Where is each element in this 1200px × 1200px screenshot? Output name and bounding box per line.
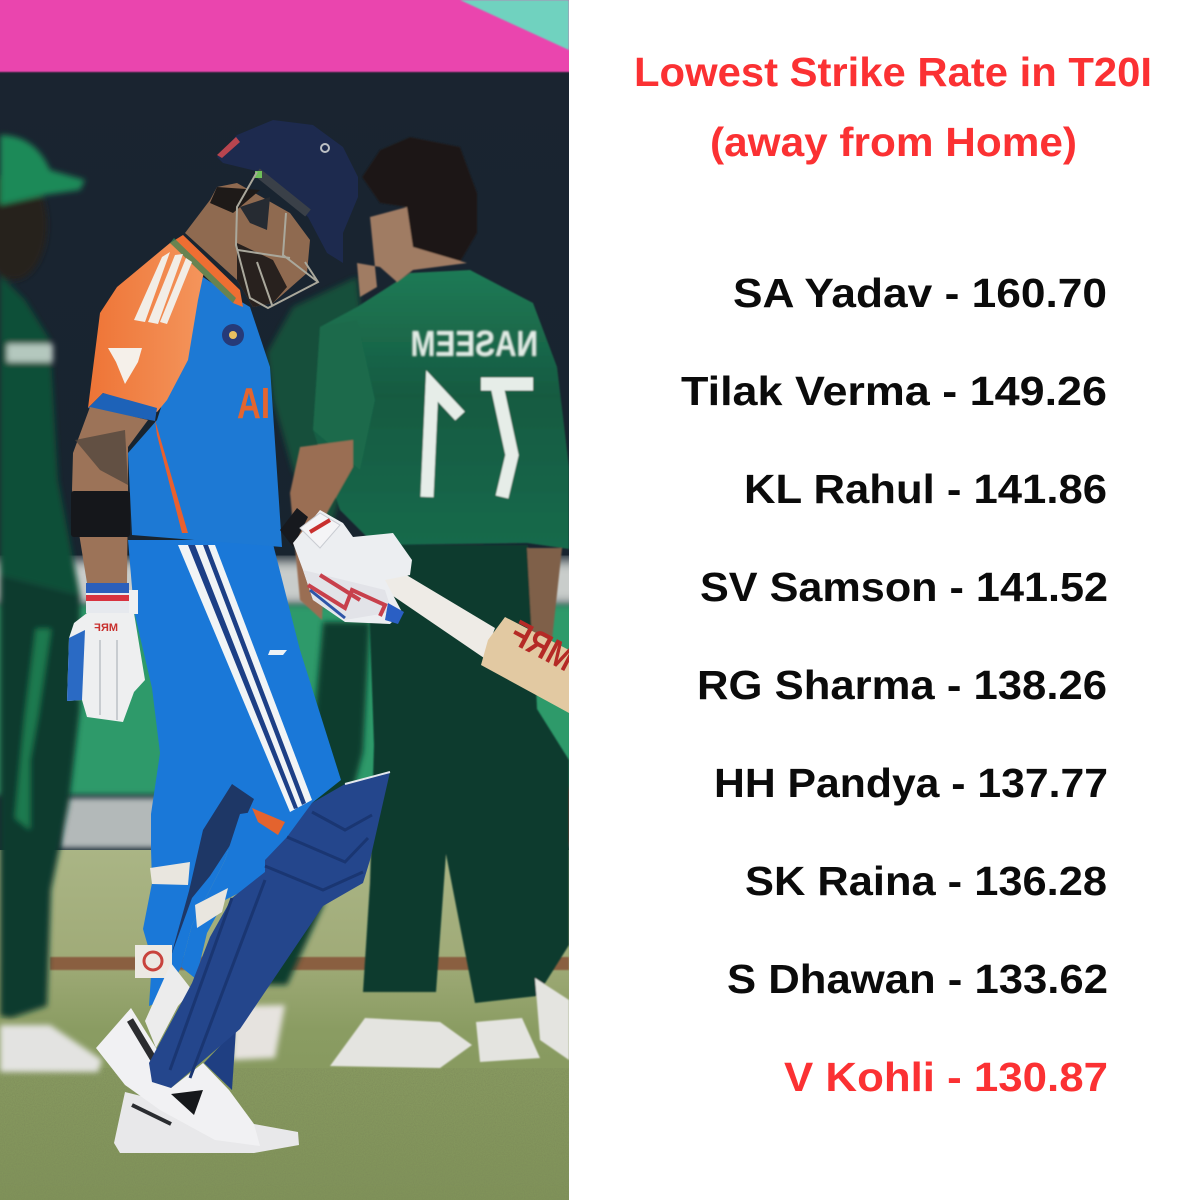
main bowler body [290,137,569,1068]
row: V Kohli highlighted: V Kohli - 130.87 [784,1054,1108,1100]
panel: white background for stats [569,0,1200,1200]
batter: right arm, gloves and bat: MRF [504,612,581,679]
batter: right arm, gloves and bat [280,508,581,713]
title: (away from Home) [710,119,1077,165]
row: Tilak Verma: Tilak Verma - 149.26 [681,368,1107,414]
bowler in green with number on back [232,137,569,1068]
photo: batter walking off with bowlers behind [0,0,590,1200]
ranking list: players and strike rates [681,270,1108,1100]
row: KL Rahul: KL Rahul - 141.86 [744,466,1107,512]
batter: pads and shoes [96,772,390,1153]
title: Lowest Strike Rate in T20I [634,49,1152,95]
main bowler body: NASEEM [411,324,538,364]
title [634,49,1152,165]
second player behind [232,277,370,1060]
batter: jersey [88,235,282,547]
row: SV Samson: SV Samson - 141.52 [700,564,1108,610]
batter: helmet and face [185,120,358,308]
row: SK Raina: SK Raina - 136.28 [745,858,1107,904]
batter: trousers [128,540,341,1006]
row: RG Sharma: RG Sharma - 138.26 [697,662,1107,708]
stadium background [0,0,590,1200]
row: SA Yadav: SA Yadav - 160.70 [733,270,1107,316]
row: HH Pandya: HH Pandya - 137.77 [714,760,1108,806]
row: S Dhawan: S Dhawan - 133.62 [727,956,1108,1002]
batter: left arm and glove [67,407,148,722]
batter: jersey: AI [237,379,270,428]
left fielder in green [0,135,102,1072]
batter: left arm and glove: MRF [94,622,118,634]
